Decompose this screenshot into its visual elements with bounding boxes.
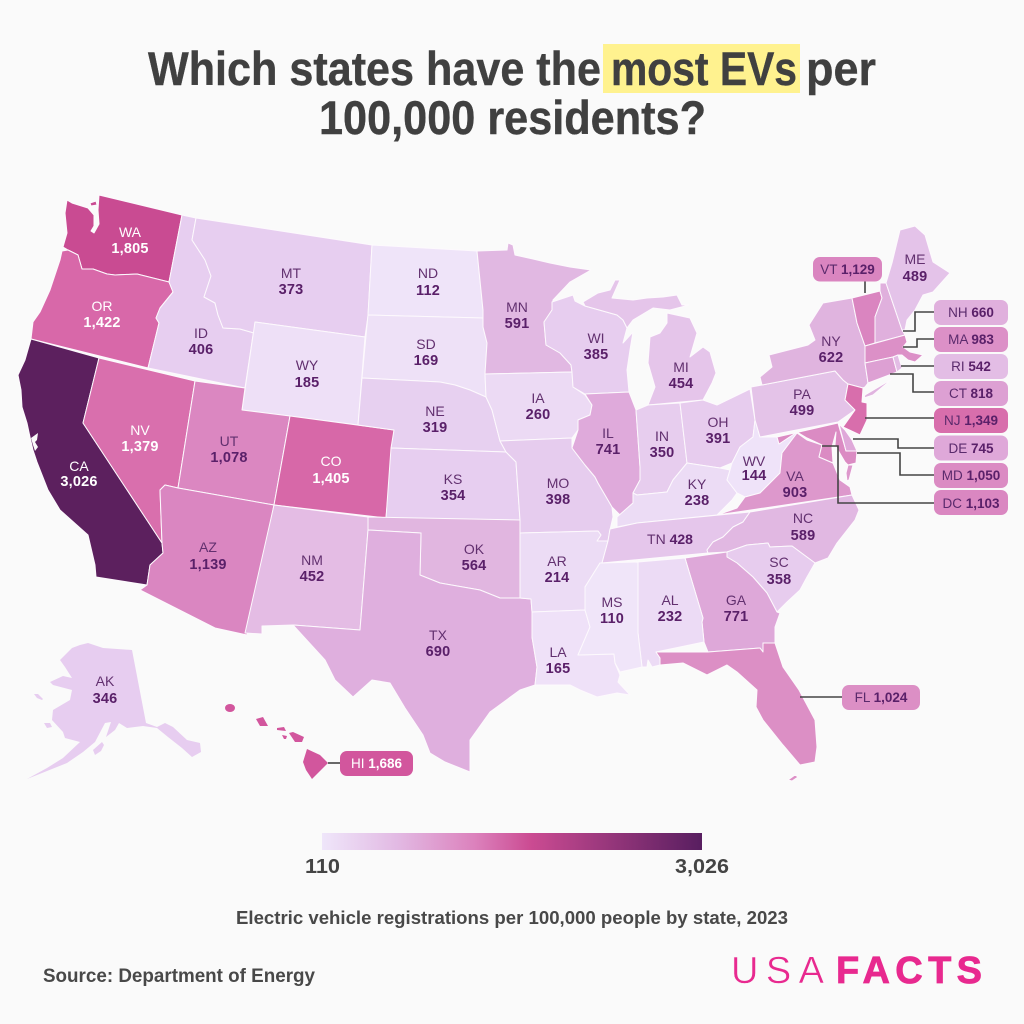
- state: NH: [875, 283, 905, 343]
- state: LA: 165: [546, 661, 570, 677]
- state: NE: 319: [423, 420, 447, 436]
- state: SC: SC: [769, 554, 789, 570]
- state: NC: [707, 495, 859, 563]
- state: ID: ID: [194, 325, 208, 341]
- logo: USAFacts: USA: [731, 950, 825, 992]
- state: ND: ND: [418, 265, 438, 281]
- map of US states: [18, 195, 950, 781]
- state: NV: 1,379: [121, 439, 159, 455]
- callout: NJ: [934, 408, 1008, 433]
- callout: NH: [934, 300, 1008, 325]
- state: FL: [656, 643, 817, 781]
- logo: USAFacts: FACTS: [836, 950, 982, 992]
- state: OH: [680, 389, 755, 468]
- region: Virginia eastern shore: [846, 465, 853, 481]
- state: ND: 112: [416, 283, 440, 299]
- state: UT: UT: [220, 433, 239, 449]
- state: AK: 346: [93, 691, 117, 707]
- state: TX: [293, 530, 537, 772]
- state: NY: NY: [821, 333, 841, 349]
- callout: VT: [813, 257, 882, 282]
- state: KY: KY: [688, 476, 707, 492]
- state: IA: 260: [526, 407, 550, 423]
- state: SD: SD: [416, 336, 436, 352]
- state: SD: 169: [414, 353, 438, 369]
- state: KS: [386, 448, 520, 520]
- state: WA: 1,805: [111, 241, 149, 257]
- state: WY: WY: [296, 357, 319, 373]
- state: AK: [27, 643, 201, 779]
- title: most EVs: [611, 42, 797, 95]
- state: WI: 385: [584, 347, 608, 363]
- state: GA: 771: [724, 609, 748, 625]
- callout: NH: NH 660: [948, 305, 994, 320]
- state: AR: 214: [545, 570, 569, 586]
- state: LA: LA: [549, 644, 567, 660]
- state: MN: [477, 243, 591, 374]
- state: CO: [274, 416, 394, 518]
- state: SC: 358: [767, 572, 791, 588]
- state: NC: NC: [793, 510, 813, 526]
- state: ID: [148, 215, 255, 388]
- state: OK: [368, 517, 520, 598]
- callout: MD: MD 1,050: [942, 468, 1000, 483]
- state: WV: [727, 420, 797, 497]
- state: GA: [685, 552, 780, 652]
- callout: RI: RI 542: [951, 359, 991, 374]
- state: NY: 622: [819, 350, 843, 366]
- state: AL: [638, 558, 704, 667]
- state: UT: [178, 381, 290, 505]
- state: VA: VA: [786, 468, 804, 484]
- callout: MA: [934, 327, 1008, 352]
- state: IN: IN: [655, 428, 669, 444]
- callout: DC: DC 1,103: [942, 496, 1000, 511]
- state: MO: [500, 438, 613, 541]
- state: SD: [362, 315, 487, 397]
- state: VA: [717, 433, 852, 515]
- state: KS: KS: [444, 471, 462, 487]
- callout: MA: MA 983: [948, 332, 994, 347]
- state: AZ: AZ: [199, 539, 217, 555]
- title: [148, 42, 876, 144]
- state: NC: 589: [791, 528, 815, 544]
- state: MO: MO: [547, 475, 569, 491]
- state: AL: AL: [661, 592, 679, 608]
- state: NE: [358, 378, 506, 452]
- state: AL: 232: [658, 609, 682, 625]
- state: CO: CO: [320, 453, 342, 469]
- state: MN: 591: [505, 316, 529, 332]
- title: Which states have the: [148, 42, 601, 95]
- state: TN: [602, 512, 750, 563]
- state: NV: NV: [130, 422, 150, 438]
- state: CA: [18, 339, 163, 585]
- state: SC: [727, 543, 815, 612]
- state: ME: 489: [903, 269, 927, 285]
- state: VA: 903: [783, 485, 807, 501]
- state: MS: 110: [600, 611, 624, 627]
- state: MT: [192, 218, 372, 337]
- title: per: [806, 42, 876, 95]
- state: NM: NM: [301, 552, 323, 568]
- caption: Electric vehicle registrations per 100,000 people by state, 2023: [236, 908, 788, 928]
- state: NE: NE: [425, 403, 445, 419]
- callout: DE: [934, 436, 1008, 460]
- state: IN: [633, 403, 687, 495]
- callout: NJ: NJ 1,349: [944, 413, 998, 428]
- state: OR: [31, 250, 173, 368]
- state: MS: [578, 562, 642, 672]
- state: ND: [368, 245, 483, 318]
- state: AK: AK: [96, 673, 115, 689]
- state: OR: OR: [92, 298, 112, 314]
- state: MS: MS: [602, 594, 622, 610]
- callout: CT: [934, 381, 1008, 406]
- state: AZ: 1,139: [189, 557, 227, 573]
- state: PA: [751, 371, 855, 437]
- state: CA: CA: [69, 458, 89, 474]
- state: AR: [520, 531, 608, 612]
- callout: MD: [934, 463, 1008, 488]
- callout: DC: [934, 490, 1008, 515]
- state: WI: [544, 295, 633, 394]
- state: KY: 238: [685, 493, 709, 509]
- state: NJ: [843, 384, 867, 435]
- region: San Francisco Bay: [31, 433, 38, 451]
- state: NV: [83, 358, 195, 543]
- state: WI: WI: [587, 330, 605, 346]
- source: Source: Department of Energy: [43, 966, 315, 987]
- callout: FL: FL 1,024: [855, 690, 908, 705]
- state: MA: [865, 335, 923, 363]
- state: KY: [617, 463, 737, 527]
- title: 100,000 residents?: [319, 91, 706, 144]
- state: MT: MT: [281, 265, 302, 281]
- state: WA: [63, 195, 182, 282]
- callout: VT: VT 1,129: [820, 262, 875, 277]
- state: RI: [893, 355, 902, 372]
- state: WV: 144: [742, 468, 766, 484]
- state: MO: 398: [546, 492, 570, 508]
- state: OK: 564: [462, 558, 486, 574]
- state: PA: PA: [793, 386, 811, 402]
- state: NM: [245, 505, 368, 634]
- state: WA: WA: [119, 224, 142, 240]
- logo: USAFacts: [731, 950, 982, 992]
- state: MT: 373: [279, 282, 303, 298]
- callout: HI: HI 1,686: [351, 756, 403, 771]
- state: LA: [532, 610, 630, 697]
- state: DE: [839, 424, 857, 451]
- state: WY: 185: [295, 375, 319, 391]
- state: NM: 452: [300, 569, 324, 585]
- state: OH: 391: [706, 431, 730, 447]
- state: HI: [225, 704, 328, 779]
- state: ME: [886, 226, 950, 330]
- state: CT: [865, 357, 897, 383]
- state: IN: 350: [650, 445, 674, 461]
- legend: color scale: 110: [305, 856, 340, 878]
- state: OR: 1,422: [83, 315, 121, 331]
- state: WV: WV: [743, 453, 766, 469]
- state: ME: ME: [904, 251, 926, 267]
- callout: CT: CT 818: [949, 386, 994, 401]
- legend: color scale: [305, 833, 729, 878]
- state: VT: [852, 291, 882, 346]
- state: AZ: [140, 485, 274, 635]
- state: MI: [583, 280, 716, 405]
- state: OK: OK: [464, 541, 485, 557]
- state: AR: AR: [547, 553, 567, 569]
- state: UT: 1,078: [210, 450, 248, 466]
- state: KS: 354: [441, 488, 465, 504]
- state: CA: 3,026: [60, 474, 98, 490]
- state: PA: 499: [790, 403, 814, 419]
- state: NY: [760, 298, 892, 398]
- state: ID: 406: [189, 342, 213, 358]
- state: CO: 1,405: [312, 471, 350, 487]
- state: IL: 741: [596, 442, 620, 458]
- callout: DE: DE 745: [948, 441, 994, 456]
- state: MI: MI: [673, 359, 689, 375]
- state: MN: MN: [506, 299, 528, 315]
- state: IL: IL: [602, 425, 614, 441]
- state: TN: TN 428: [647, 531, 693, 547]
- callout: RI: [934, 354, 1008, 379]
- state: IA: [485, 372, 592, 441]
- state: MI: 454: [669, 376, 693, 392]
- callout: HI: [340, 751, 413, 776]
- state: GA: GA: [726, 592, 747, 608]
- state: OH: OH: [708, 414, 728, 430]
- callout: FL: [842, 685, 920, 710]
- state: WY: [242, 322, 365, 425]
- state: MD: [777, 423, 857, 465]
- state: IA: IA: [531, 390, 545, 406]
- callout: connector lines: [328, 281, 934, 763]
- state: IL: [572, 392, 640, 515]
- state: TX: 690: [426, 644, 450, 660]
- state: TX: TX: [429, 627, 448, 643]
- legend: color scale: 3,026: [675, 856, 729, 878]
